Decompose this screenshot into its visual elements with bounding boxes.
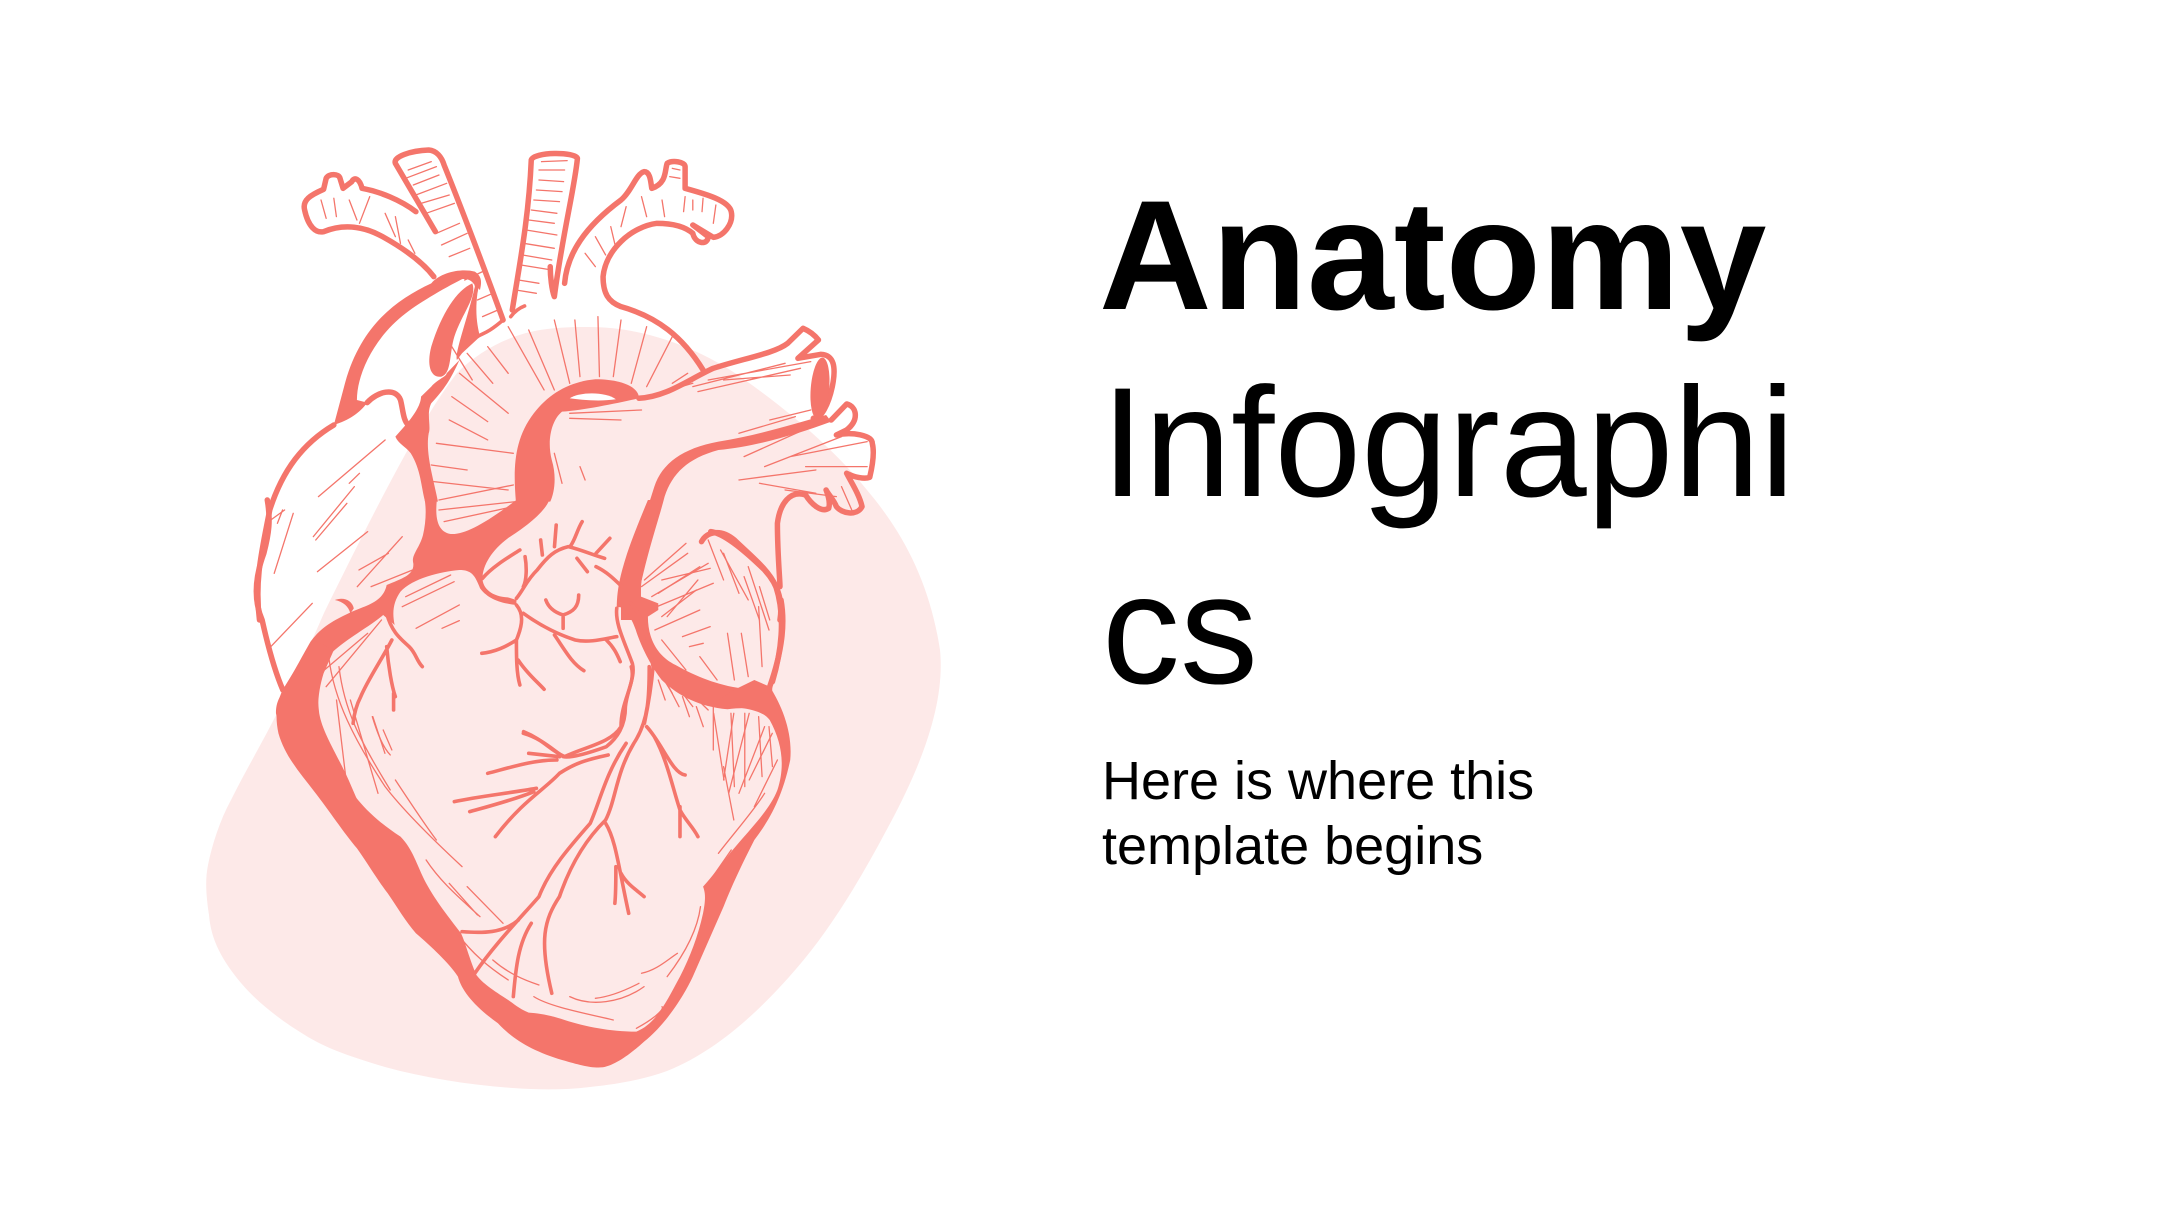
title: regular line 2: cs: [1102, 543, 1258, 717]
outer muscle wall: [277, 640, 791, 1067]
ventricle wall hatching: [329, 657, 777, 1028]
thick shadow shapes: [334, 270, 832, 620]
fine hatching on right atrium: [642, 540, 770, 620]
heart drawing: upper vessels and atria: [258, 150, 873, 620]
pink background blob: [206, 327, 941, 1089]
text: template begins: [1102, 816, 1483, 876]
left appendage lower outline: [256, 500, 283, 690]
coronary arteries: [353, 522, 653, 757]
coronary branches: [454, 667, 698, 997]
central muscle shadow: [276, 500, 549, 800]
title: regular line 1: Infographi: [1101, 356, 1795, 530]
right atrium outline: [702, 533, 781, 682]
vessel outlines: [258, 150, 873, 620]
hatching: [271, 503, 772, 793]
coronary band: [617, 500, 772, 717]
right atrium lower outline: [770, 600, 783, 687]
small hook: [335, 599, 354, 613]
heart drawing: lower ventricles: [277, 600, 791, 1067]
heart drawing: mid section: [256, 500, 781, 800]
subtitle: Here is where this: [1102, 751, 1534, 811]
fine hatching on vessels: [277, 161, 867, 537]
title: bold line: Anatomy: [1099, 169, 1766, 343]
subtitle: [1102, 751, 1534, 876]
